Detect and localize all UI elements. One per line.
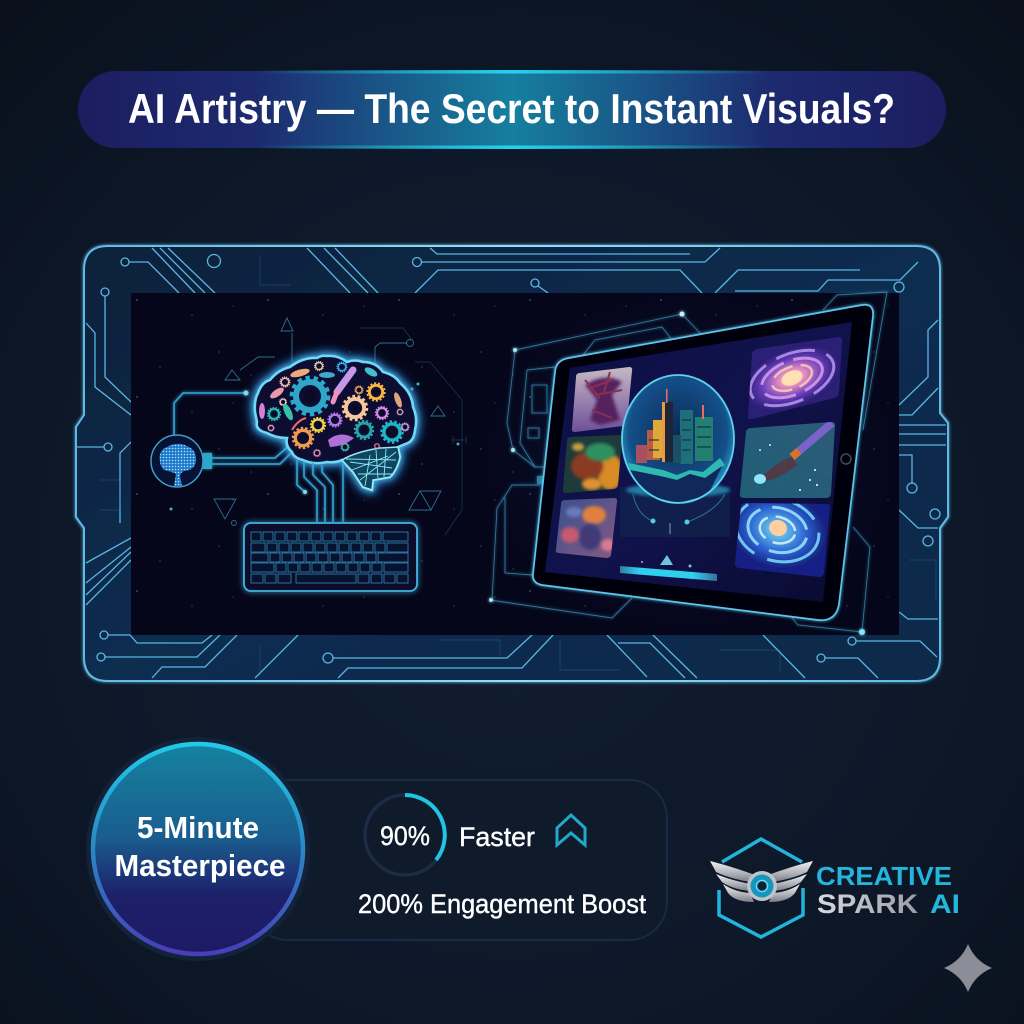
small brain circle bbox=[151, 435, 203, 487]
logo hexagon bbox=[719, 839, 803, 937]
small brain node bbox=[151, 390, 292, 487]
90% progress ring bbox=[365, 795, 445, 875]
circuit frame panel bbox=[76, 246, 948, 681]
city in glass sphere bbox=[622, 375, 734, 503]
5-minute masterpiece circle bbox=[85, 736, 311, 962]
tablet screen bbox=[545, 322, 852, 602]
frame outline bbox=[76, 246, 948, 681]
stat badge panel bbox=[85, 736, 667, 962]
faint background schematics bbox=[170, 318, 466, 535]
circuit traces bbox=[77, 248, 946, 678]
brain outline bbox=[255, 356, 416, 490]
creative spark ai logo: AI bbox=[930, 889, 960, 919]
logo text: CREATIVE bbox=[816, 861, 952, 891]
faster label: Faster bbox=[459, 822, 535, 852]
logo wings and eye bbox=[710, 861, 813, 902]
brain halo bbox=[255, 356, 416, 490]
tablet bbox=[533, 305, 873, 620]
neon keyboard bbox=[244, 523, 417, 591]
thumbnail: paint brush bbox=[738, 420, 838, 500]
title banner bbox=[78, 70, 946, 149]
5-minute masterpiece circle: 5-Minute bbox=[137, 810, 259, 845]
brain doodles bbox=[259, 365, 404, 447]
progress bar with triangle bbox=[620, 555, 717, 581]
tablet home button bbox=[841, 454, 851, 464]
hologram base glow bbox=[620, 483, 730, 537]
thumbnail: purple galaxy bbox=[748, 337, 842, 420]
thumbnail: blue spiral galaxy bbox=[734, 503, 830, 577]
tablet circuit surround bbox=[489, 292, 887, 635]
90% progress ring: 90% bbox=[380, 821, 430, 851]
5-minute masterpiece circle: Masterpiece bbox=[114, 848, 286, 883]
icon: up chevron bbox=[557, 815, 585, 845]
creative spark ai logo bbox=[710, 839, 960, 937]
title text: AI Artistry — The Secret to Instant Visuals? bbox=[128, 85, 895, 132]
cerebellum bbox=[342, 447, 400, 490]
connector lines to main brain bbox=[174, 390, 292, 469]
central dark illustration panel bbox=[131, 285, 905, 635]
brain gears bbox=[268, 361, 409, 457]
creative spark ai logo: SPARK bbox=[817, 889, 919, 919]
thumbnail: abstract figure bbox=[555, 496, 619, 560]
tablet body bbox=[533, 305, 873, 620]
brain to keyboard traces bbox=[297, 460, 343, 522]
engagement boost text: 200% Engagement Boost bbox=[358, 889, 647, 919]
thumbnail: green dragon bbox=[562, 435, 622, 493]
neon brain with gears bbox=[255, 356, 416, 490]
keyboard keys bbox=[251, 532, 408, 583]
icon: four-point sparkle bbox=[944, 944, 992, 992]
thumbnail: purple dragon bbox=[572, 367, 632, 432]
